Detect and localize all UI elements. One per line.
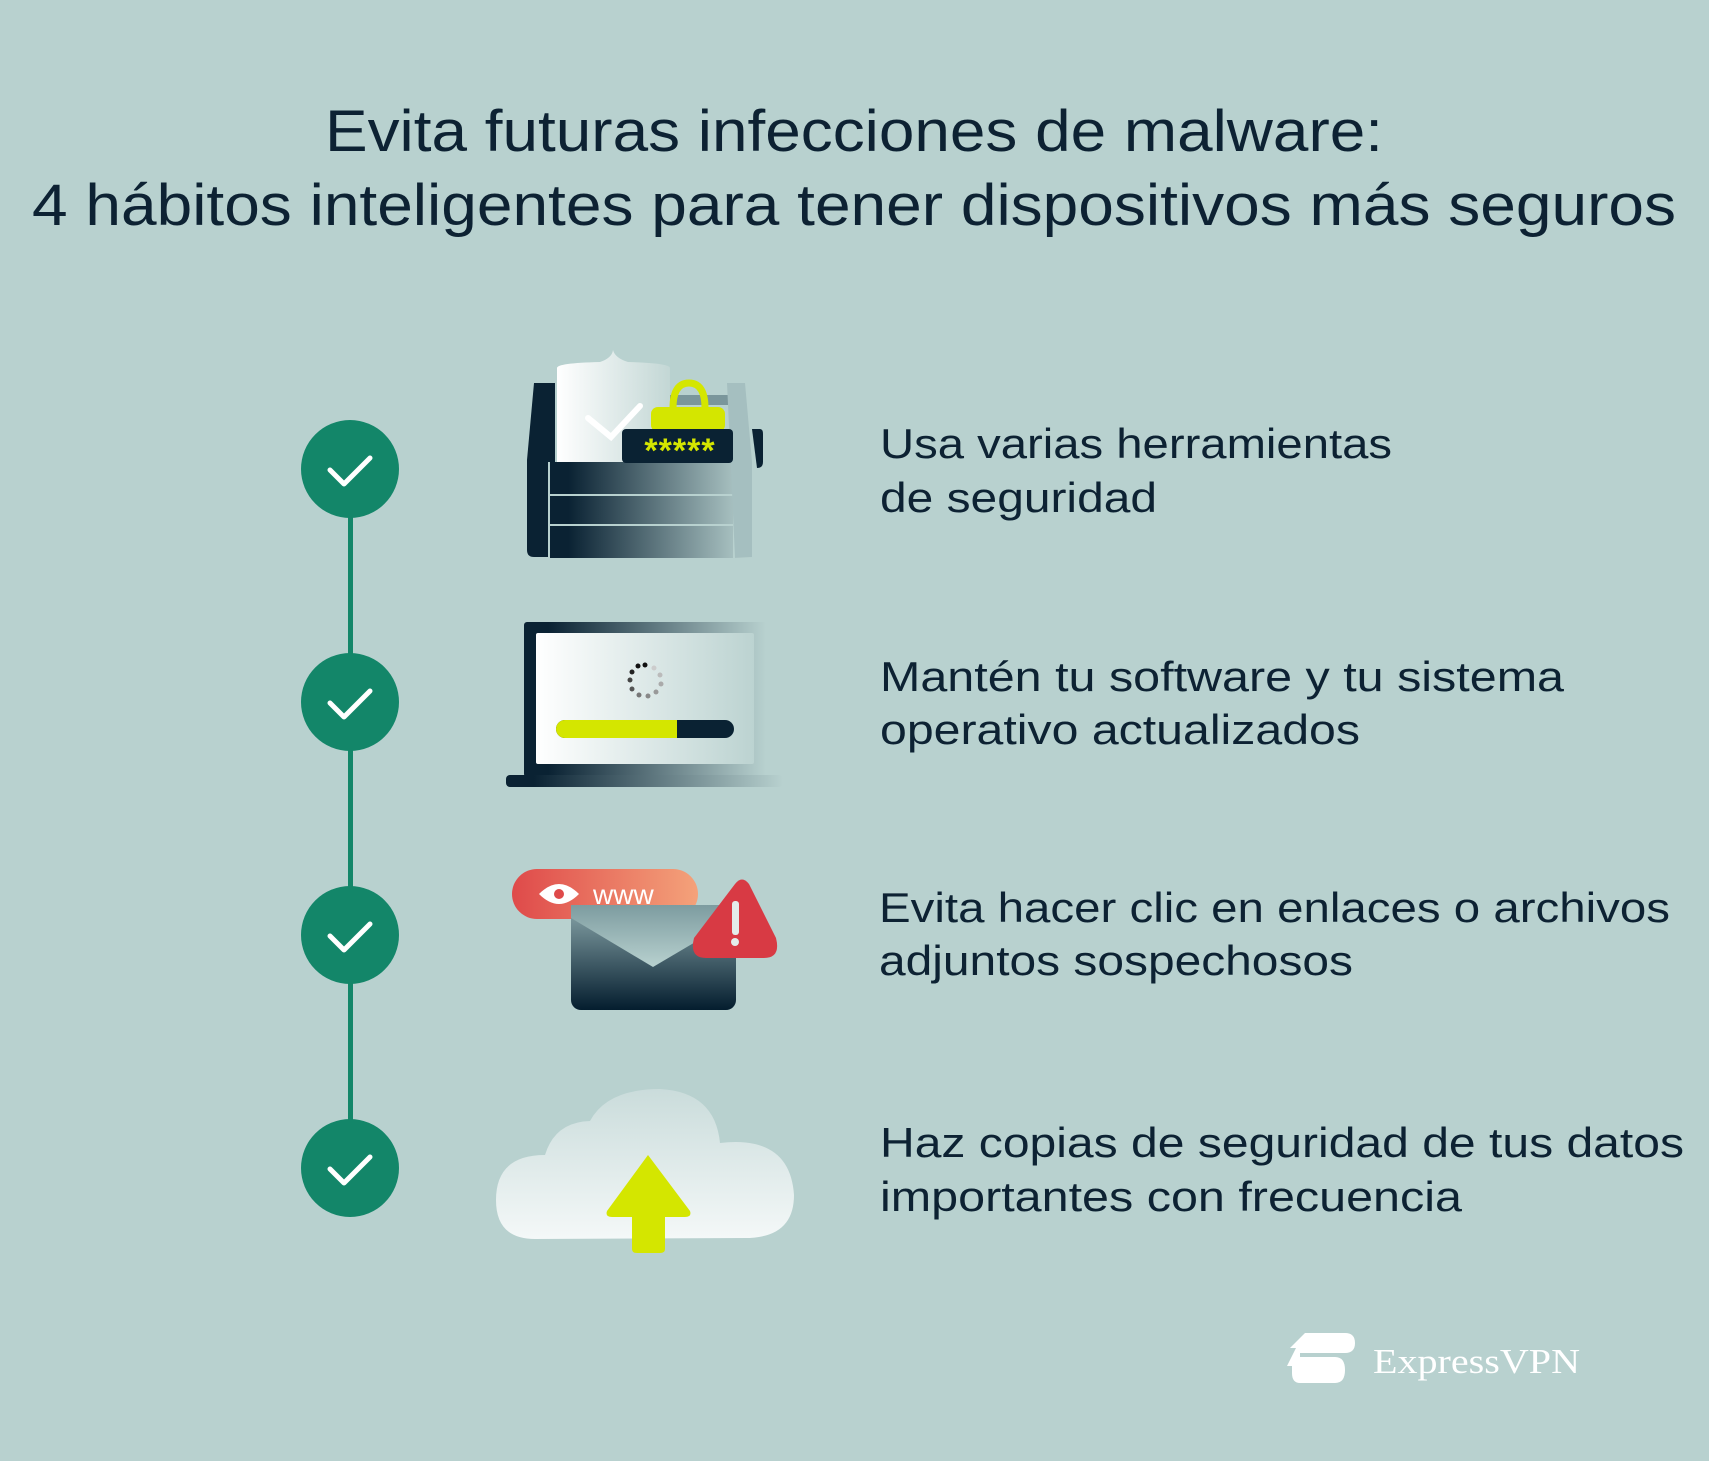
icon: email warning: www: [592, 879, 654, 910]
title: Evita futuras infecciones de malware:: [325, 99, 1383, 164]
title: 4 hábitos inteligentes para tener dispositivos más seguros: [32, 173, 1676, 238]
text: habit 4: importantes con frecuencia: [880, 1173, 1463, 1220]
text: habit 3: Evita hacer clic en enlaces o archivos: [879, 884, 1670, 931]
logo: ExpressVPN: [1287, 1333, 1580, 1383]
text: habit 2: Mantén tu software y tu sistema: [880, 653, 1565, 700]
text: habit 3: adjuntos sospechosos: [879, 937, 1353, 984]
icon: toolbox: *****: [644, 432, 716, 470]
text: habit 4: Haz copias de seguridad de tus datos: [880, 1119, 1684, 1166]
title: [32, 99, 1676, 238]
text: habit 1: de seguridad: [880, 474, 1157, 521]
check circle 3: [301, 886, 399, 984]
icon: email warning: [512, 869, 777, 1010]
text: habit 2: operativo actualizados: [880, 706, 1360, 753]
text: habit 4: [880, 1119, 1684, 1220]
check circle 4: [301, 1119, 399, 1217]
text: habit 3: [879, 884, 1670, 984]
timeline connector: [348, 469, 353, 1168]
icon: laptop: [506, 622, 783, 787]
icon: cloud upload: [496, 1089, 794, 1253]
text: habit 1: Usa varias herramientas: [880, 420, 1392, 467]
text: habit 1: [880, 420, 1392, 521]
check circle 2: [301, 653, 399, 751]
text: habit 2: [880, 653, 1565, 753]
icon: toolbox: [527, 350, 763, 558]
check circle 1: [301, 420, 399, 518]
logo: ExpressVPN: ExpressVPN: [1373, 1342, 1580, 1381]
